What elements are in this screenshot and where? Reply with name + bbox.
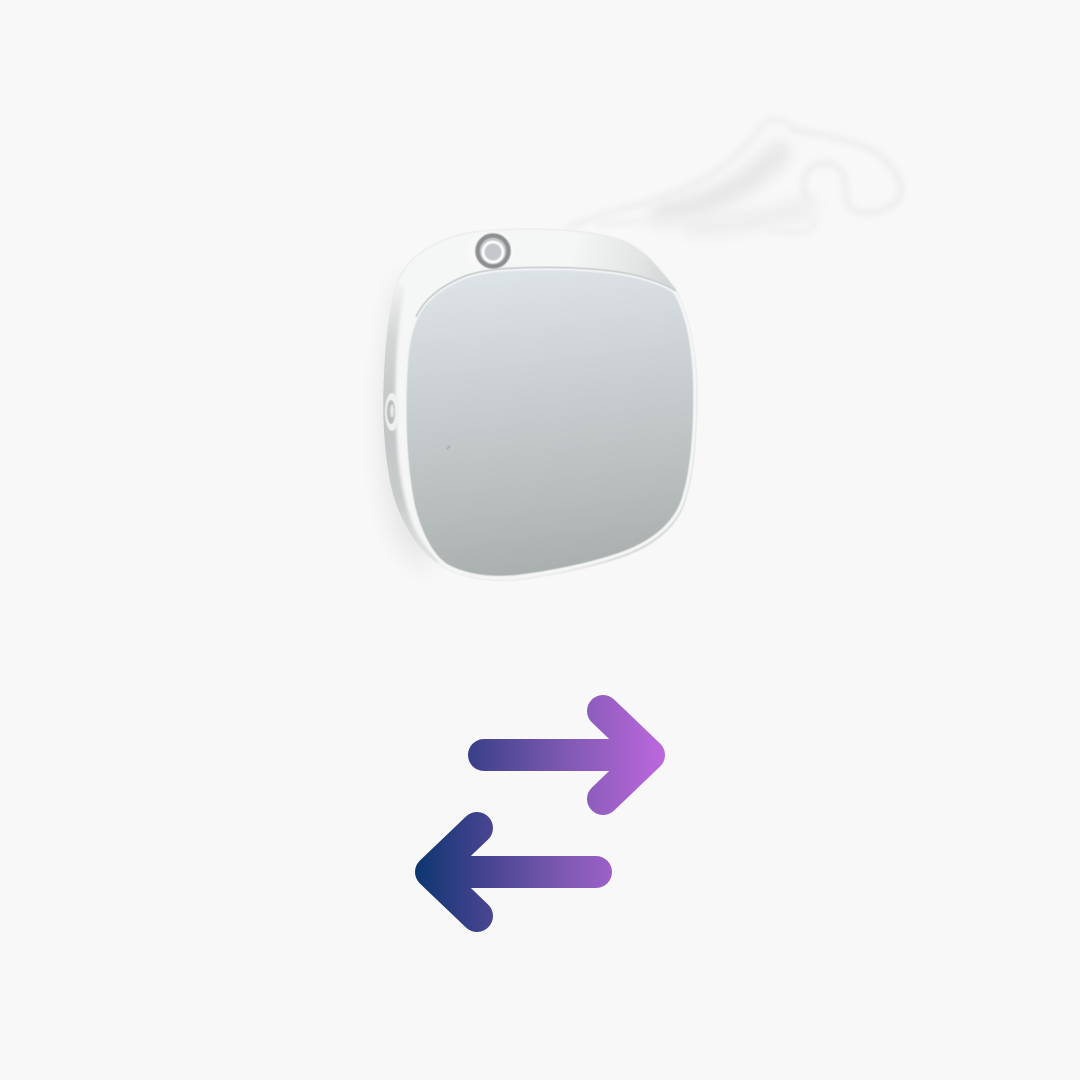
icon: exchange arrows xyxy=(431,711,649,916)
nozzle metal ring xyxy=(478,236,508,266)
top nozzle xyxy=(466,231,514,269)
side button xyxy=(385,393,399,431)
left side shading xyxy=(387,285,436,566)
small mark on face xyxy=(447,446,450,449)
device shadow xyxy=(381,275,430,572)
arrow: pointing left xyxy=(431,828,596,916)
front face panel xyxy=(405,268,695,578)
face top edge line xyxy=(416,267,676,317)
nozzle highlight ring xyxy=(483,242,503,262)
device body xyxy=(383,229,697,580)
device: wall-mounted scent diffuser xyxy=(381,229,697,580)
arrow: pointing right xyxy=(484,711,649,799)
smoke wisp xyxy=(568,120,901,232)
nozzle collar xyxy=(466,231,514,269)
infographic canvas xyxy=(379,143,810,932)
